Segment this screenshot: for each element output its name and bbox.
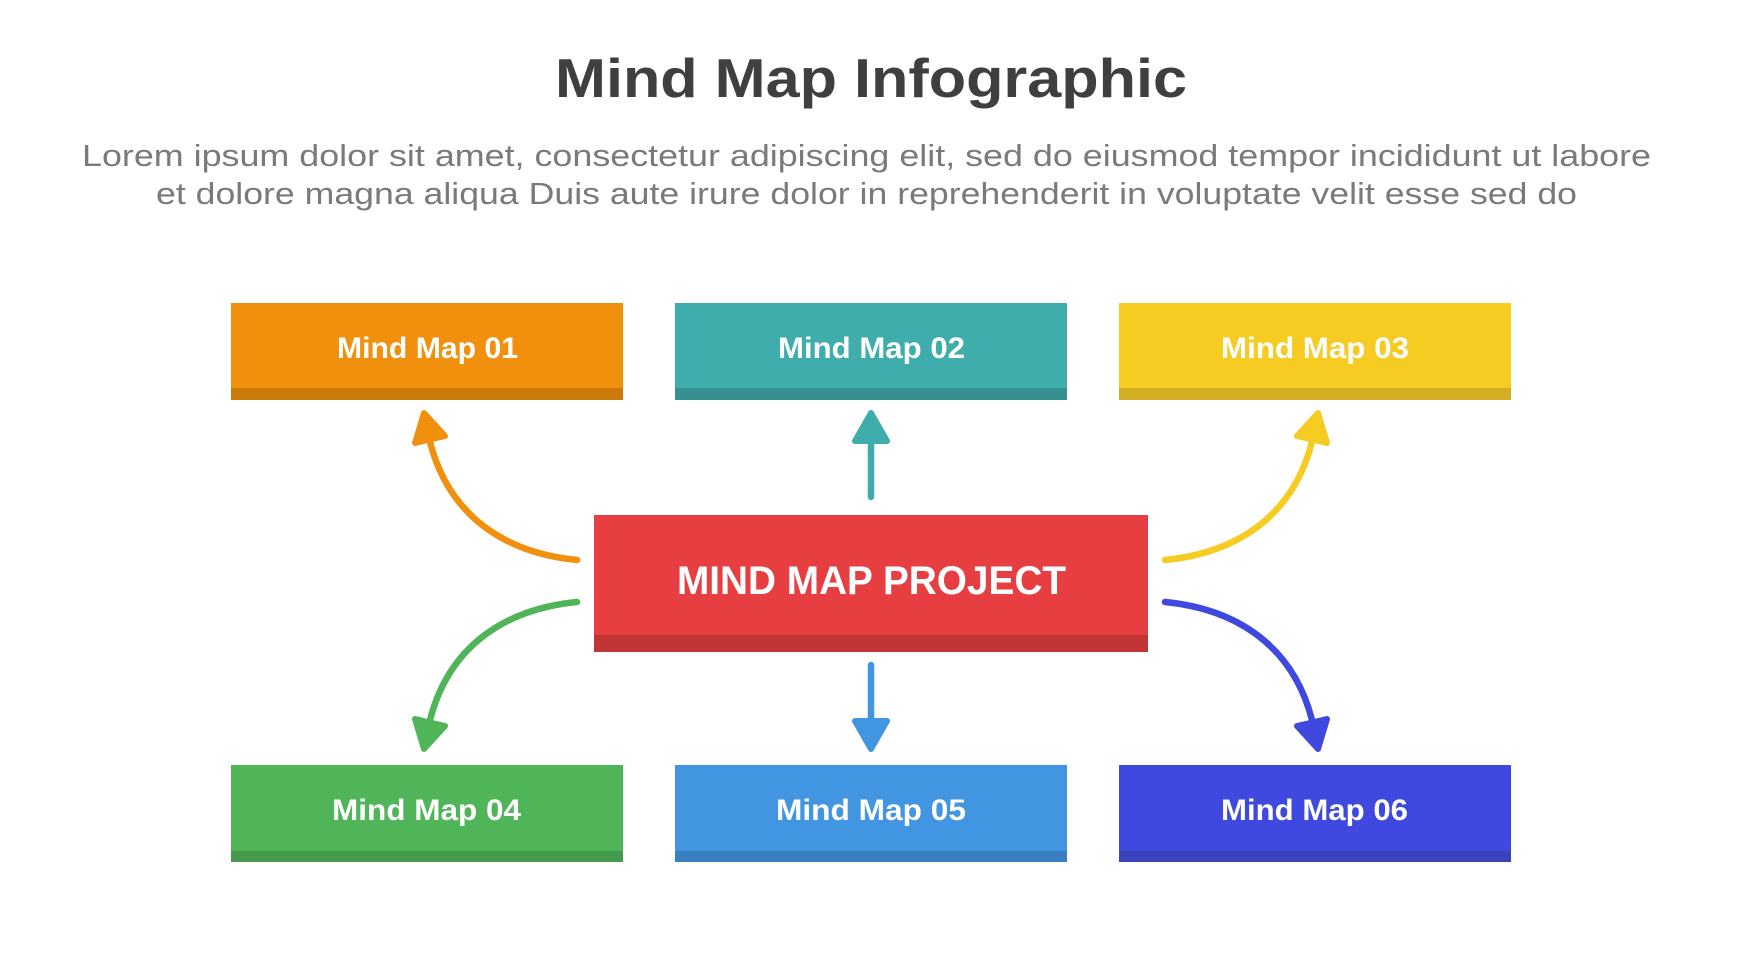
box: Mind Map 03: Mind Map 03: [1221, 332, 1409, 365]
box: Mind Map 06: Mind Map 06: [1221, 794, 1408, 827]
title: Mind Map Infographic: [555, 47, 1187, 109]
box: Mind Map 05: Mind Map 05: [776, 794, 966, 827]
box: Mind Map 02: [675, 303, 1067, 400]
box: Mind Map 06: [1119, 765, 1511, 862]
arrow: center to 05: [855, 665, 887, 749]
box: Mind Map 01: [231, 303, 623, 400]
box: Mind Map 05: [675, 765, 1067, 862]
subtitle text block: Lorem ipsum dolor sit amet, consectetur adipiscing elit, sed do eiusmod tempor incididunt ut labore: [82, 138, 1651, 173]
subtitle text block: [82, 138, 1651, 211]
center box: Mind Map Project: MIND MAP PROJECT: [677, 559, 1066, 603]
arrow: center to 06: [1165, 602, 1327, 749]
arrow: center to 03: [1165, 413, 1327, 560]
box: Mind Map 01: Mind Map 01: [337, 332, 518, 365]
arrow: center to 01: [415, 413, 577, 560]
box: Mind Map 04: Mind Map 04: [332, 794, 521, 827]
box: Mind Map 03: [1119, 303, 1511, 400]
arrow: center to 02: [855, 413, 887, 497]
box: Mind Map 02: Mind Map 02: [778, 332, 965, 365]
arrow: center to 04: [415, 602, 577, 749]
box: Mind Map 04: [231, 765, 623, 862]
subtitle text block: et dolore magna aliqua Duis aute irure dolor in reprehenderit in voluptate velit esse sed do: [156, 176, 1577, 211]
center box: Mind Map Project: [594, 515, 1148, 652]
